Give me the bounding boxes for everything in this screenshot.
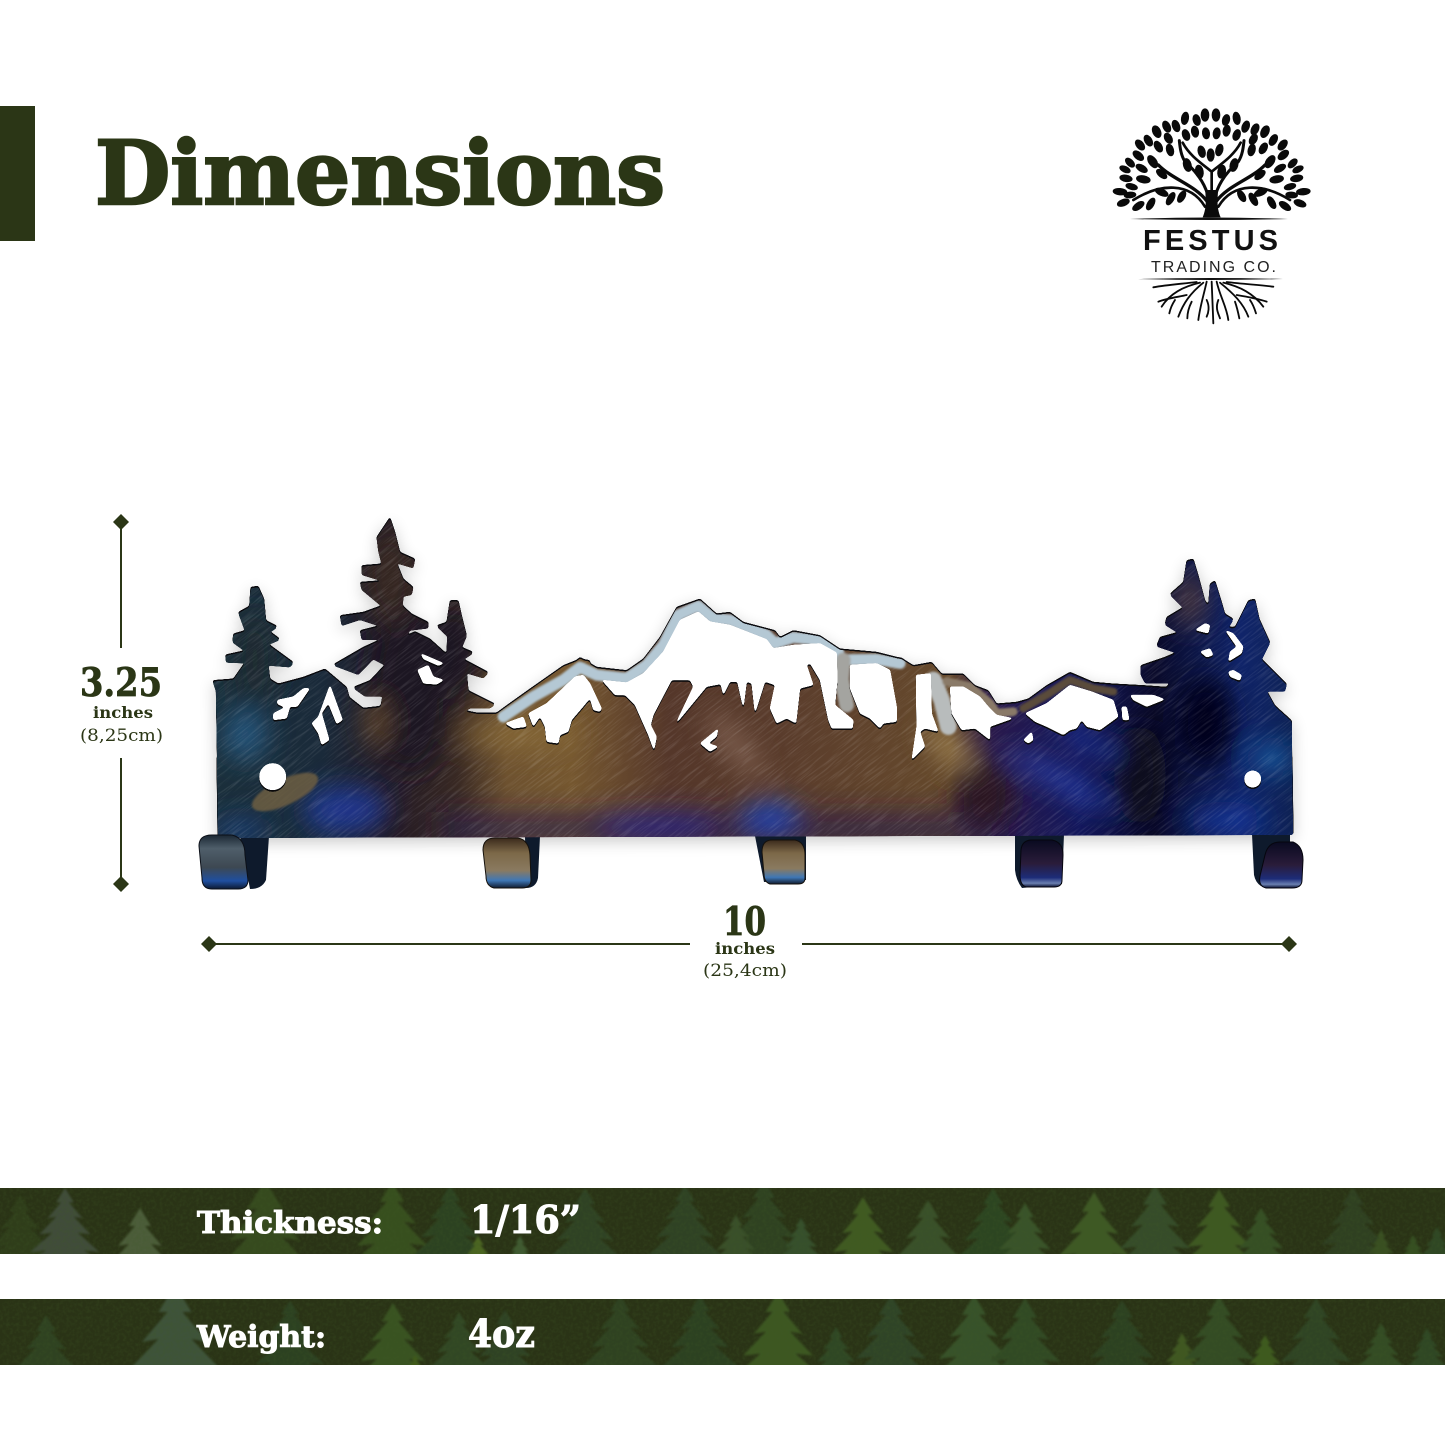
logo divider bottom	[1138, 278, 1283, 280]
width arrow	[201, 936, 1297, 952]
width unit: inches	[715, 939, 775, 958]
width value: 10	[723, 899, 766, 945]
hook 4	[1020, 840, 1063, 887]
logo divider top	[1130, 218, 1288, 220]
hole weld mark	[251, 772, 319, 812]
brushed streak texture	[214, 523, 1293, 838]
height arrow	[113, 514, 129, 892]
height metric: (8,25cm)	[80, 726, 163, 746]
logo wordmark: FESTUS	[1143, 225, 1278, 257]
panel: thickness band	[0, 1188, 1445, 1254]
hook 3	[762, 840, 805, 884]
thickness value: 1/16”	[470, 1197, 581, 1242]
icon: tree leaves	[1113, 109, 1310, 212]
forest texture bottom band	[0, 1299, 1445, 1365]
product: metal mountain key rack	[190, 500, 1320, 889]
height unit: inches	[93, 703, 153, 722]
logo: Festus Trading Co.	[1113, 109, 1310, 323]
title accent bar	[0, 106, 35, 241]
icon: roots	[1153, 282, 1273, 323]
forest texture top band	[0, 1188, 1445, 1254]
thickness label: Thickness:	[197, 1206, 383, 1241]
hook 1	[199, 835, 248, 889]
height dimension	[80, 514, 163, 892]
cutout edge shading	[260, 613, 1261, 791]
icon: tree trunk and branches	[1133, 141, 1290, 217]
hook 2	[483, 838, 531, 888]
height value: 3.25	[80, 660, 162, 706]
mountain and tree cutouts	[260, 612, 1261, 790]
width dimension	[201, 899, 1297, 981]
product shadow	[213, 522, 1293, 842]
metal edge	[213, 517, 1293, 837]
metal colour layer	[213, 520, 1293, 838]
panel: weight band	[0, 1299, 1445, 1365]
weight value: 4oz	[468, 1311, 535, 1356]
hook backs	[240, 834, 1290, 889]
width metric: (25,4cm)	[703, 961, 787, 981]
silver ridge strip	[503, 606, 1113, 727]
hook 5	[1260, 842, 1303, 888]
logo tagline: TRADING CO.	[1151, 259, 1276, 276]
title: Dimensions	[95, 121, 665, 225]
weight label: Weight:	[196, 1320, 326, 1355]
